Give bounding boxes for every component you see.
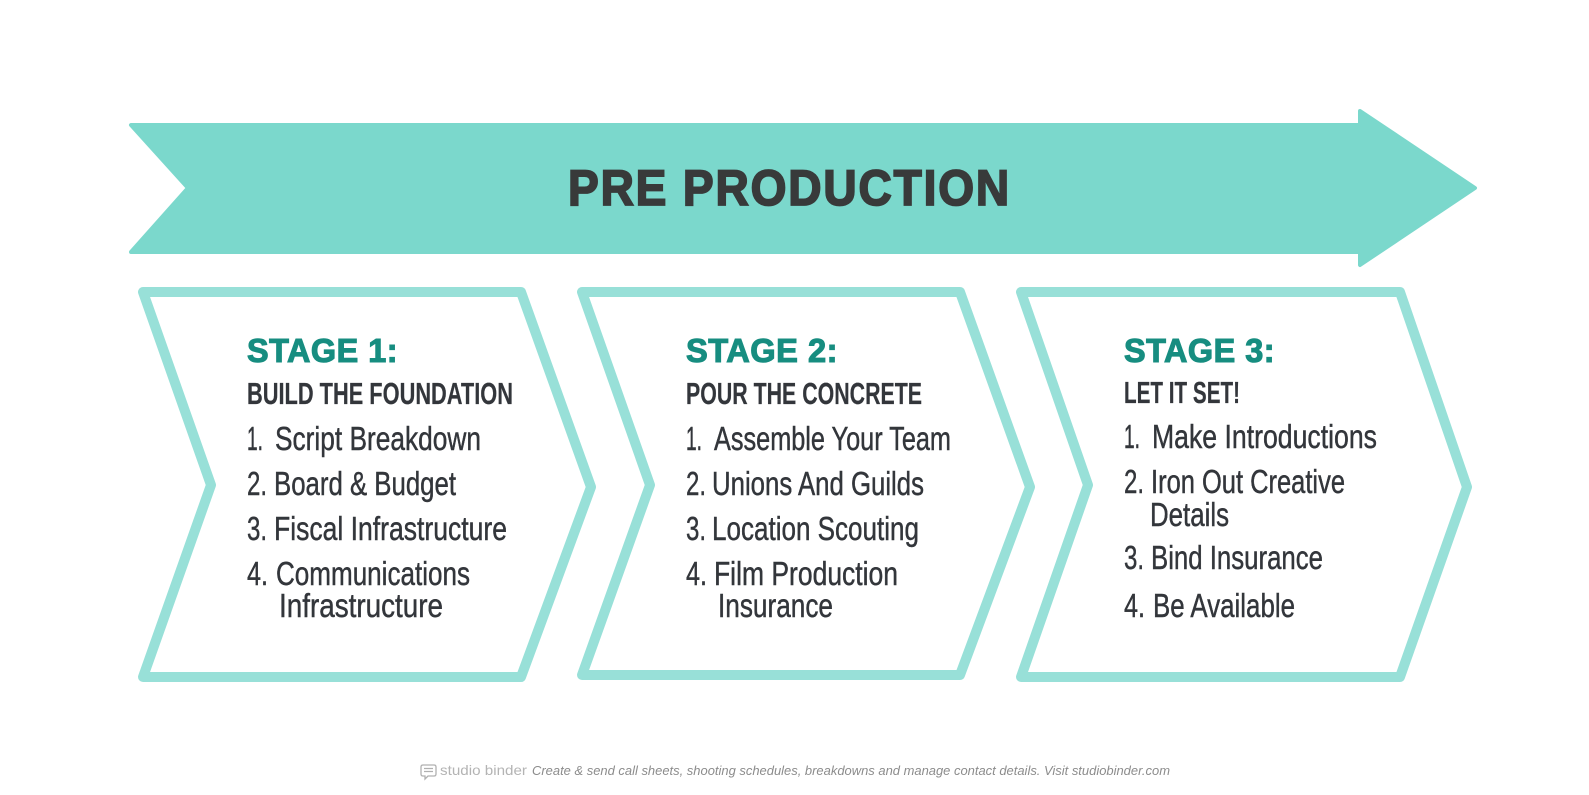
stage 2 list: 3. — [686, 510, 706, 547]
stage 2 list: 2. — [686, 465, 706, 502]
stage 1 list: Board & Budget — [274, 465, 456, 502]
stage 2 subheading: POUR THE CONCRETE — [686, 376, 922, 411]
footer tagline: Create & send call sheets, shooting schedules, breakdowns and manage contact details. Visit studiobinder.com — [532, 764, 1170, 778]
stage 2 heading: STAGE 2: — [686, 332, 838, 369]
stage 3 list: Details — [1150, 496, 1229, 533]
stage 3 list: Be Available — [1153, 587, 1295, 624]
stage 1 list: Infrastructure — [279, 587, 443, 624]
stage 3 list: Bind Insurance — [1151, 539, 1323, 576]
arrow banner — [131, 111, 1475, 265]
stage 1 list: 1. — [247, 420, 263, 457]
stage 1 subheading: BUILD THE FOUNDATION — [247, 376, 513, 411]
stage 3 list: 3. — [1124, 539, 1144, 576]
stage 3 list: Make Introductions — [1152, 418, 1377, 455]
stage 1 list: Fiscal Infrastructure — [274, 510, 507, 547]
panel: stage 2 — [582, 292, 1030, 675]
stage 3 list: 2. — [1124, 463, 1144, 500]
stage 3 subheading: LET IT SET! — [1124, 375, 1240, 410]
icon: studio binder logo — [421, 765, 436, 779]
title: PRE PRODUCTION — [568, 160, 1011, 216]
stage 1 list: 4. — [247, 555, 268, 592]
stage 1 list: 2. — [247, 465, 267, 502]
stage 2 list: 1. — [686, 420, 702, 457]
stage 3 list: 4. — [1124, 587, 1145, 624]
stage 1 heading: STAGE 1: — [247, 332, 398, 369]
stage 2 list: Location Scouting — [712, 510, 919, 547]
stage 3 list — [1124, 418, 1377, 624]
stage 1 list: Script Breakdown — [275, 420, 481, 457]
stage 1 list: 3. — [247, 510, 267, 547]
stage 2 list — [686, 420, 951, 624]
footer brand: studio binder — [440, 762, 527, 778]
stage 2 list: Assemble Your Team — [714, 420, 951, 457]
stage 2 list: Insurance — [718, 587, 833, 624]
stage 2 list: 4. — [686, 555, 707, 592]
footer — [421, 762, 1170, 779]
stage 1 list: Communications — [276, 555, 470, 592]
panel: stage 3 — [1021, 292, 1467, 677]
panel: stage 1 — [143, 292, 591, 677]
stage 2 list: Unions And Guilds — [712, 465, 924, 502]
stage 3 heading: STAGE 3: — [1124, 332, 1275, 369]
stage 2 list: Film Production — [714, 555, 898, 592]
stage 3 list: 1. — [1124, 418, 1140, 455]
stage 1 list — [247, 420, 507, 624]
stage 3 list: Iron Out Creative — [1151, 463, 1345, 500]
